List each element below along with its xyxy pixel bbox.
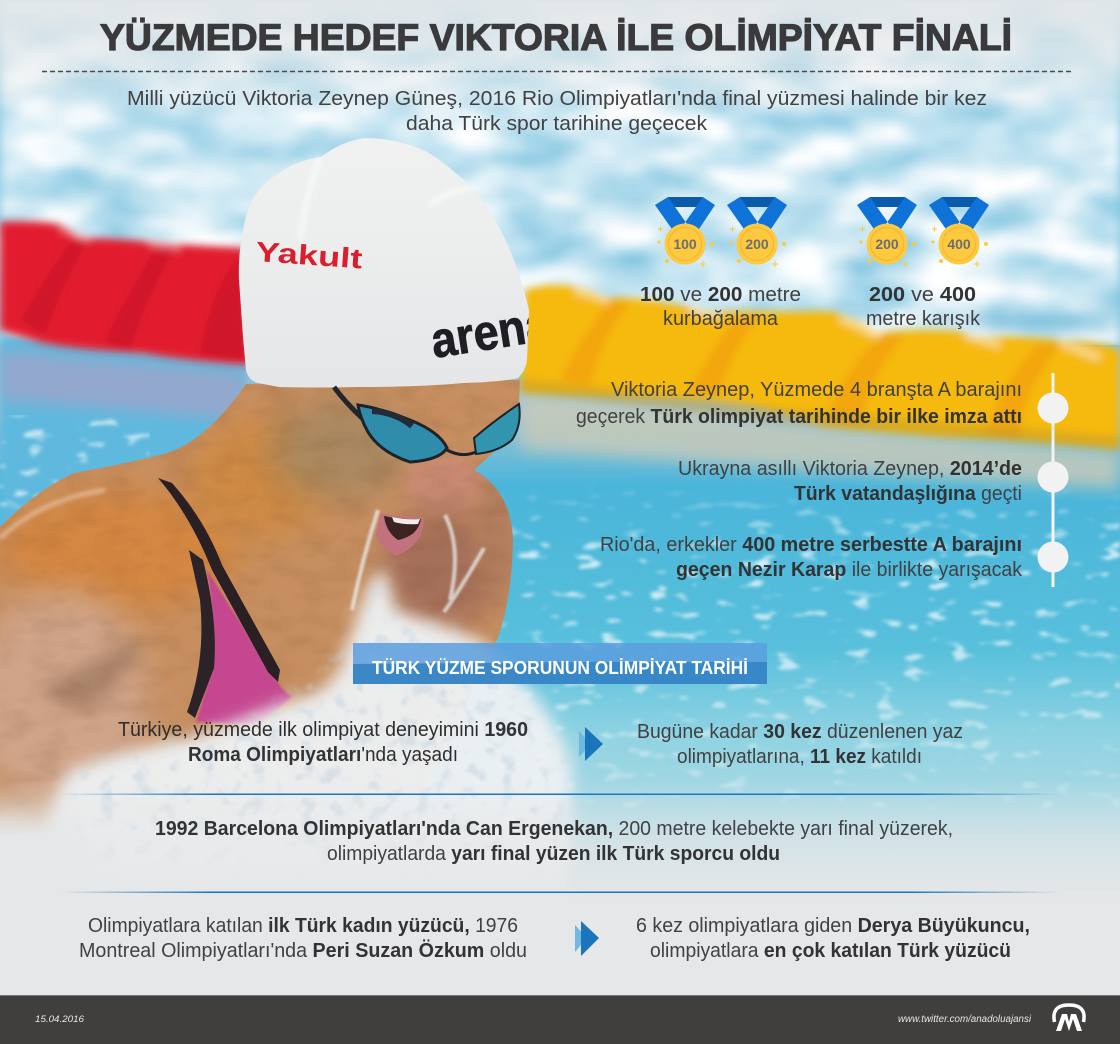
water under the red rope: [0, 335, 245, 525]
arrow: [579, 727, 603, 761]
arrow: [575, 921, 599, 956]
history: first woman: Montreal Olimpiyatları'nda Peri Suzan Özkum oldu: [79, 939, 527, 962]
history: participation: [637, 721, 963, 768]
swimmer photograph: [0, 138, 572, 908]
history: Can Ergenekan: 1992 Barcelona Olimpiyatları'nda Can Ergenekan, 200 metre kelebekte yarı final yüzerek,: [155, 818, 953, 840]
fact: citizenship: Ukrayna asıllı Viktoria Zeynep, 2014’de: [678, 458, 1022, 480]
fact: Nezir Karap: [600, 534, 1023, 581]
history: first games: Türkiye, yüzmede ilk olimpiyat deneyimini 1960: [118, 719, 528, 741]
medal caption: medley: 200 ve 400: [869, 284, 976, 306]
fact: four A standards: Viktoria Zeynep, Yüzmede 4 branşta A barajını: [611, 379, 1022, 401]
swimsuit: [196, 570, 292, 725]
history: participation: olimpiyatlarına, 11 kez katıldı: [677, 746, 922, 768]
medal 400: 400: [947, 236, 971, 252]
swim cap: [239, 138, 529, 388]
history: Derya Büyükuncu: 6 kez olimpiyatlara giden Derya Büyükuncu,: [636, 915, 1030, 937]
intro text: [127, 88, 987, 135]
fact: citizenship: Türk vatandaşlığına geçti: [794, 483, 1022, 505]
medal caption: breaststroke: 100 ve 200 metre: [640, 284, 801, 306]
intro text: daha Türk spor tarihine geçecek: [406, 113, 708, 135]
water splash: [40, 510, 572, 890]
fact: Nezir Karap: geçen Nezir Karap ile birlikte yarışacak: [676, 559, 1023, 581]
fact: four A standards: [576, 379, 1022, 428]
twitter address: www.twitter.com/anadoluajansi: [898, 1014, 1032, 1025]
history: Can Ergenekan: [155, 818, 953, 865]
section banner: TÜRK YÜZME SPORUNUN OLİMPİYAT TARİHİ: [372, 658, 748, 678]
pale band below yellow rope: [520, 392, 1120, 490]
history: Can Ergenekan: olimpiyatlarda yarı final yüzen ilk Türk sporcu oldu: [327, 843, 780, 865]
history: Derya Büyükuncu: [636, 915, 1030, 962]
mouth: [376, 513, 424, 556]
timeline: [1038, 373, 1068, 587]
medal 200: 200: [875, 236, 899, 252]
fact: four A standards: geçerek Türk olimpiyat tarihinde bir ilke imza attı: [576, 406, 1022, 428]
intro text: Milli yüzücü Viktoria Zeynep Güneş, 2016 Rio Olimpiyatları'nda final yüzmesi halinde bir kez: [127, 88, 987, 110]
history: first games: Roma Olimpiyatları'nda yaşadı: [188, 744, 458, 766]
goggles: [334, 387, 520, 462]
medals group 1: 100 and 200: [655, 197, 787, 267]
cap logo: arena: arena: [427, 295, 555, 369]
history: Derya Büyükuncu: olimpiyatlara en çok katılan Türk yüzücü: [650, 940, 1011, 962]
yellow lane rope: [520, 285, 1120, 450]
history: first woman: Olimpiyatlara katılan ilk Türk kadın yüzücü, 1976: [88, 915, 518, 937]
title: YÜZMEDE HEDEF VIKTORIA İLE OLİMPİYAT FİNALİ: [100, 17, 1012, 58]
medal caption: breaststroke: kurbağalama: [663, 308, 779, 330]
bottom fade to grey: [0, 780, 1120, 905]
body and shoulder: [0, 380, 525, 840]
water bubbles: [0, 415, 150, 525]
history: first games: [118, 719, 528, 766]
history: participation: Bugüne kadar 30 kez düzenlenen yaz: [637, 721, 963, 743]
medal caption: medley: metre karışık: [866, 308, 981, 330]
history: first woman: [79, 915, 527, 962]
section banner: [353, 643, 767, 684]
fact: citizenship: [678, 458, 1022, 505]
footer: [0, 995, 1120, 1044]
medal caption: medley: [866, 284, 981, 330]
date: 15.04.2016: [35, 1014, 85, 1025]
fact: Nezir Karap: Rio'da, erkekler 400 metre serbestte A barajını: [600, 534, 1022, 556]
medal 100: 100: [673, 236, 697, 252]
medals group 2: 200 and 400: [857, 197, 989, 267]
cap logo: Yakult: Yakult: [255, 236, 363, 274]
logo: Anadolu Agency: [1054, 1005, 1084, 1031]
red lane rope: [0, 221, 250, 365]
medal 200: 200: [745, 236, 769, 252]
medal caption: breaststroke: [640, 284, 801, 330]
